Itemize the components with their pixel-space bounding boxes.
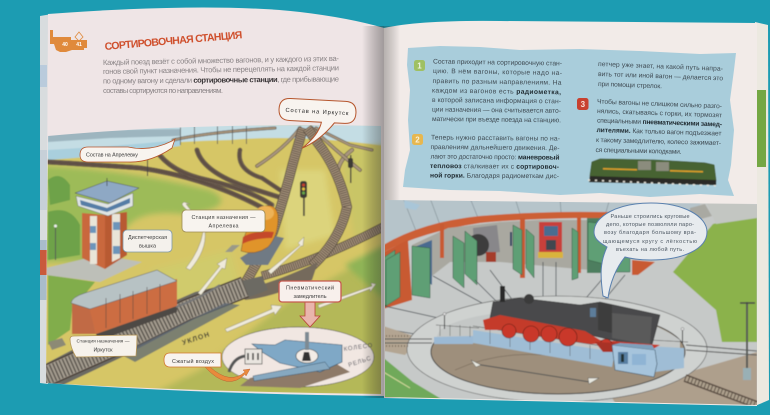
step 3 text: к такому замедлителю, колесо зажимает- — [596, 137, 721, 147]
label: destination Aprelevka: Апрелевка — [208, 224, 238, 230]
far poles — [180, 126, 247, 145]
inset: pneumatic retarder cross-section — [222, 327, 374, 388]
step 1 text: матически при въезде поезда на станцию. — [432, 116, 561, 124]
box wagon — [48, 270, 220, 350]
label: destination Irkutsk: Станция назначения — — [76, 338, 130, 344]
intro text block: Каждый поезд везёт с собой множество вагонов, и у каждого из этих ва- — [103, 54, 339, 67]
turntable ring and pit — [430, 325, 686, 395]
ground — [40, 120, 385, 400]
ground and apron — [380, 198, 760, 408]
callout: compressed air with arrow — [164, 353, 250, 382]
yard tracks — [238, 128, 385, 300]
speech bubble about roundhouses: въехать на любой путь. — [616, 246, 684, 253]
right page sheet — [384, 21, 757, 406]
label: destination Irkutsk — [70, 335, 137, 357]
callout: pneumatic retarder with red arrow: замедлитель — [294, 294, 327, 300]
callout: train to Irkutsk: Состав на Иркутск — [285, 108, 349, 117]
sky and far city — [40, 125, 385, 160]
roundhouse roof — [385, 200, 700, 244]
step badge 2: 2 — [415, 136, 420, 144]
step 3 text: нялись, скатываясь с горки, их тормозят — [597, 108, 722, 119]
left page spine shadow — [362, 26, 384, 398]
label: control tower: вышка — [139, 244, 156, 250]
speech bubble about roundhouses: депо, которые позволяли паро- — [606, 222, 694, 228]
illustration: marshalling yard — [30, 120, 385, 400]
speech bubble about roundhouses: возу благодаря большому вра- — [604, 230, 696, 236]
speech bubble about roundhouses: щающемуся кругу с лёгкостью — [603, 239, 697, 245]
right page stack with green tab — [755, 22, 769, 406]
main double track on hump — [46, 276, 267, 384]
page header icon: orange tram with page numbers — [50, 30, 87, 52]
step 2 text continued: вить тот или иной вагон — делается это — [598, 70, 723, 82]
step 2 text: Теперь нужно расставить вагоны по на- — [431, 135, 560, 143]
inset: pneumatic retarder cross-section: КОЛЕСО — [343, 343, 374, 353]
step 2 text: ной горки. Благодаря радиометкам дис- — [430, 172, 559, 180]
far tracks — [48, 128, 372, 212]
callout: compressed air with arrow: Сжатый воздух — [172, 358, 214, 365]
hall interiors — [380, 218, 655, 310]
step 1 text: в которой записана информация о стан- — [432, 96, 561, 105]
outer circle platform — [407, 296, 707, 402]
turntable bridge — [434, 325, 688, 372]
label: destination Irkutsk: Иркутск — [94, 348, 113, 354]
tracks fanning out of stalls — [380, 262, 625, 340]
label: destination Aprelevka — [182, 210, 265, 232]
concrete apron under tower — [46, 255, 142, 282]
step 2 text: лают это достаточно просто: маневровый — [430, 153, 560, 162]
step 3 text: Чтобы вагоны не слишком сильно разго- — [597, 98, 722, 110]
intro text block: составы сортируются по направлениям. — [103, 86, 223, 95]
label: control tower: Диспетчерская — [128, 235, 167, 241]
step 3 text — [595, 98, 722, 156]
intro text block: по одному вагону и сделали сортировочные станции, где прибывающие — [103, 74, 339, 85]
control tower — [75, 178, 139, 269]
page header icon: orange tram with page numbers: 40 — [62, 42, 68, 48]
step 2 text: тепловоз сталкивает их с сортировоч- — [430, 163, 559, 171]
step 2 text: правлениям дальнейшего движения. Де- — [430, 143, 560, 152]
green meadows — [40, 145, 385, 395]
step badge 3 — [577, 98, 588, 110]
step 2 text continued — [598, 60, 723, 90]
operator cabin — [612, 343, 657, 377]
left page sheet — [46, 7, 384, 396]
label: destination Aprelevka: Станция назначения — — [192, 215, 256, 221]
page stack at left edge — [40, 14, 52, 384]
lawn — [385, 217, 757, 398]
steam locomotive — [483, 286, 660, 352]
green stall doors — [380, 222, 630, 308]
step 3 text: ся специальными колодками. — [595, 147, 682, 156]
hump direction label: УКЛОН — [181, 331, 211, 347]
step badge 2 — [412, 134, 423, 145]
step 3 text: специальными пневматическими замед- — [597, 118, 722, 128]
callout: pneumatic retarder with red arrow: Пневматический — [286, 284, 334, 292]
step 2 text continued: петчер уже знает, на какой путь напра- — [598, 60, 723, 73]
step 2 text continued: при помощи стрелок. — [598, 81, 662, 90]
step badge 1 — [414, 60, 425, 71]
callout: train to Irkutsk — [277, 98, 357, 151]
label: control tower — [123, 230, 172, 252]
intro text block: гонов свой пункт назначения. Чтобы не перецеплять на каждой станции — [103, 63, 339, 76]
intro text block — [103, 54, 339, 95]
approach rails — [380, 339, 757, 355]
lamp posts — [443, 302, 755, 380]
parked locomotives in stalls — [467, 222, 563, 262]
right page spine shadow — [384, 26, 400, 398]
inset: pneumatic retarder cross-section: РЕЛЬС — [348, 356, 373, 369]
step badge 1: 1 — [417, 62, 422, 70]
illustration: roundhouse with turntable — [380, 198, 760, 410]
callout: train to Aprelevka: Состав на Апрелевку — [86, 152, 138, 158]
step 1 text: ции назначения — она считывается авто- — [432, 107, 561, 115]
step 2 text — [430, 135, 560, 180]
title: СОРТИРОВОЧНАЯ СТАНЦИЯ — [104, 29, 243, 53]
brick arch — [385, 211, 609, 252]
step 1 text — [432, 59, 562, 124]
step 1 text: править по разным направлениям. На — [432, 78, 562, 87]
page header icon: orange tram with page numbers: 41 — [76, 42, 82, 48]
step 1 text: Состав приходит на сортировочную стан- — [433, 59, 562, 68]
tank wagon — [225, 206, 284, 265]
white arrows showing sorting directions — [182, 202, 376, 332]
brown ground right and left — [380, 325, 757, 410]
callout: pneumatic retarder with red arrow — [279, 281, 341, 327]
concrete far wall right — [690, 204, 712, 219]
icon: green diesel locomotive — [588, 159, 720, 186]
step 1 text: цию. В нём вагоны, которые надо на- — [433, 68, 562, 77]
speech bubble about roundhouses: Раньше строились круговые — [610, 214, 690, 220]
step 1 text: каждом из вагонов есть радиометка, — [432, 88, 561, 96]
speech bubble about roundhouses — [594, 203, 707, 298]
step badge 3: 3 — [581, 100, 586, 109]
step 3 text: лителями. Как только вагон подъезжает — [596, 127, 722, 138]
panel: blue info panel — [403, 46, 736, 197]
signal lamps — [54, 150, 353, 260]
callout: train to Aprelevka — [80, 139, 175, 162]
